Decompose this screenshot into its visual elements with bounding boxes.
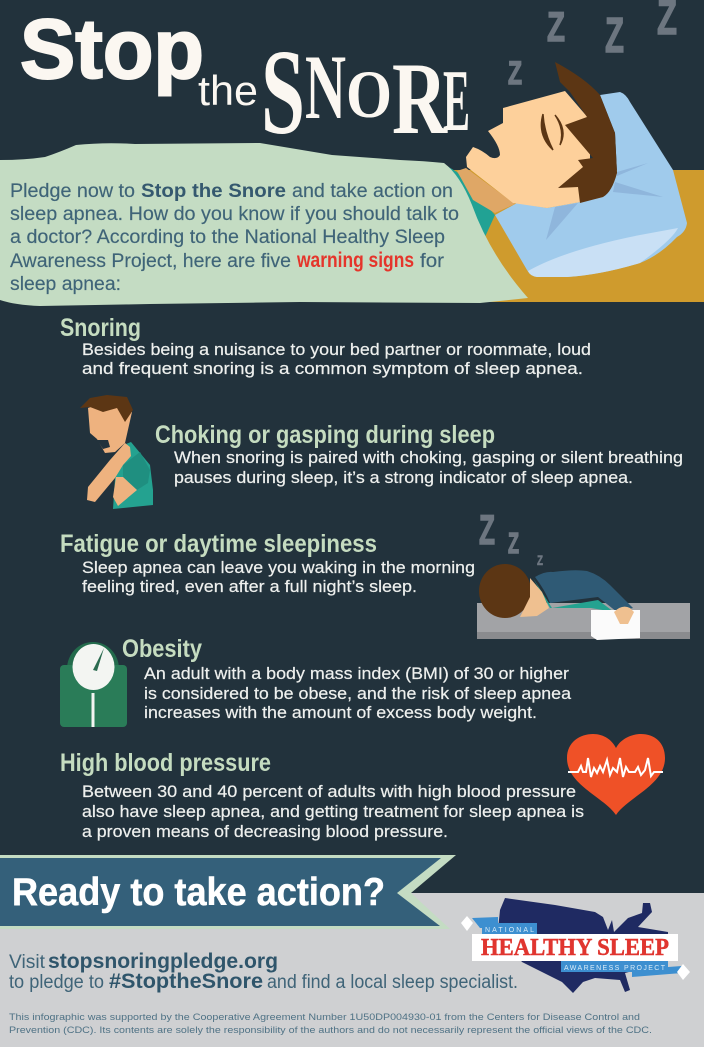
shirt and neck (447, 166, 495, 237)
section: high blood pressure (60, 749, 584, 841)
intro text: Stop the Snore (141, 181, 286, 202)
intro text: sleep apnea. How do you know if you should talk to (10, 204, 459, 225)
call to action text: and find a local sleep specialist. (267, 972, 518, 993)
section: fatigue: Sleep apnea can leave you waking in the morning (82, 559, 475, 577)
section: fatigue: feeling tired, even after a full night’s sleep. (82, 578, 417, 596)
title: the (198, 67, 258, 114)
section: choking or gasping: pauses during sleep, it’s a strong indicator of sleep apnea. (174, 469, 633, 487)
sleeping-man z letters (508, 0, 677, 91)
section: high blood pressure: High blood pressure (60, 749, 271, 777)
intro text: for (420, 251, 445, 272)
logo: national healthy sleep awareness project (461, 898, 690, 993)
section: snoring: Besides being a nuisance to your bed partner or roommate, loud (82, 341, 591, 359)
icon: choking man (80, 395, 153, 509)
intro text: warning signs (296, 249, 414, 272)
call to action text: #StoptheSnore (109, 970, 263, 993)
panel: footer background (0, 893, 704, 1047)
icon: heart with pulse (567, 734, 665, 815)
bed (450, 170, 704, 302)
section: high blood pressure: a proven means of decreasing blood pressure. (82, 823, 448, 841)
banner: ready to take action (0, 855, 456, 929)
intro text: and take action on (292, 181, 453, 202)
pillow (495, 92, 687, 277)
intro text (10, 181, 459, 295)
title: S (261, 25, 305, 160)
section: obesity: Obesity (122, 635, 202, 663)
intro text: sleep apnea: (10, 274, 121, 295)
hair (555, 62, 617, 203)
sleeping-man z letters: Z (605, 9, 624, 63)
icon: sleeping man on pillow (447, 62, 687, 277)
panel: blanket intro (0, 143, 528, 306)
intro text: a doctor? According to the National Healthy Sleep (10, 227, 445, 248)
section: high blood pressure: Between 30 and 40 percent of adults with high blood pressure (82, 783, 576, 801)
call to action text (9, 950, 518, 993)
sleeping-man z letters: Z (508, 55, 522, 91)
section: choking or gasping (155, 421, 683, 487)
logo: national healthy sleep awareness project: AWARENESS PROJECT (564, 965, 666, 972)
disclaimer: Prevention (CDC). Its contents are solely the responsibility of the authors and do not necessarily represent the official views of the CDC. (9, 1025, 652, 1036)
title: O (346, 56, 392, 132)
disclaimer: This infographic was supported by the Cooperative Agreement Number 1U50DP004930-01 from the Centers for Disease Control and (9, 1012, 640, 1023)
section: snoring: Snoring (60, 314, 141, 342)
banner: ready to take action: Ready to take action? (12, 871, 385, 914)
title (20, 2, 470, 160)
title: N (305, 36, 346, 138)
icon: weight scale (60, 642, 127, 727)
call to action text: Visit (9, 952, 46, 973)
section: obesity: An adult with a body mass index (BMI) of 30 or higher (144, 665, 570, 683)
logo: national healthy sleep awareness project: NATIONAL (485, 927, 534, 934)
section: obesity (122, 635, 572, 722)
icon: man asleep on desk: Z (479, 506, 495, 553)
section: choking or gasping: When snoring is paired with choking, gasping or silent breathing (174, 449, 683, 467)
section: obesity: increases with the amount of excess body weight. (144, 704, 537, 722)
section: fatigue (60, 530, 475, 596)
text: E (443, 53, 470, 150)
section: obesity: is considered to be obese, and the risk of sleep apnea (144, 685, 572, 703)
icon: man asleep on desk: Z (508, 528, 519, 560)
title: Stop (20, 2, 204, 96)
face (466, 91, 590, 208)
icon: man asleep on desk: Z (537, 552, 543, 568)
disclaimer (9, 1012, 652, 1036)
section: snoring (60, 314, 591, 378)
section: fatigue: Fatigue or daytime sleepiness (60, 530, 377, 558)
intro text: Awareness Project, here are five (10, 251, 291, 272)
section: snoring: and frequent snoring is a common symptom of sleep apnea. (82, 360, 583, 378)
icon: man asleep on desk (477, 506, 690, 640)
title: R (392, 42, 448, 156)
intro text: Pledge now to (10, 181, 135, 202)
section: choking or gasping: Choking or gasping during sleep (155, 421, 495, 449)
call to action text: stopsnoringpledge.org (48, 950, 278, 973)
sleeping-man z letters: Z (547, 3, 565, 50)
section: high blood pressure: also have sleep apnea, and getting treatment for sleep apnea is (82, 803, 584, 821)
call to action text: to pledge to (9, 972, 104, 993)
logo: national healthy sleep awareness project: HEALTHY SLEEP (481, 935, 669, 961)
eye (541, 114, 563, 150)
